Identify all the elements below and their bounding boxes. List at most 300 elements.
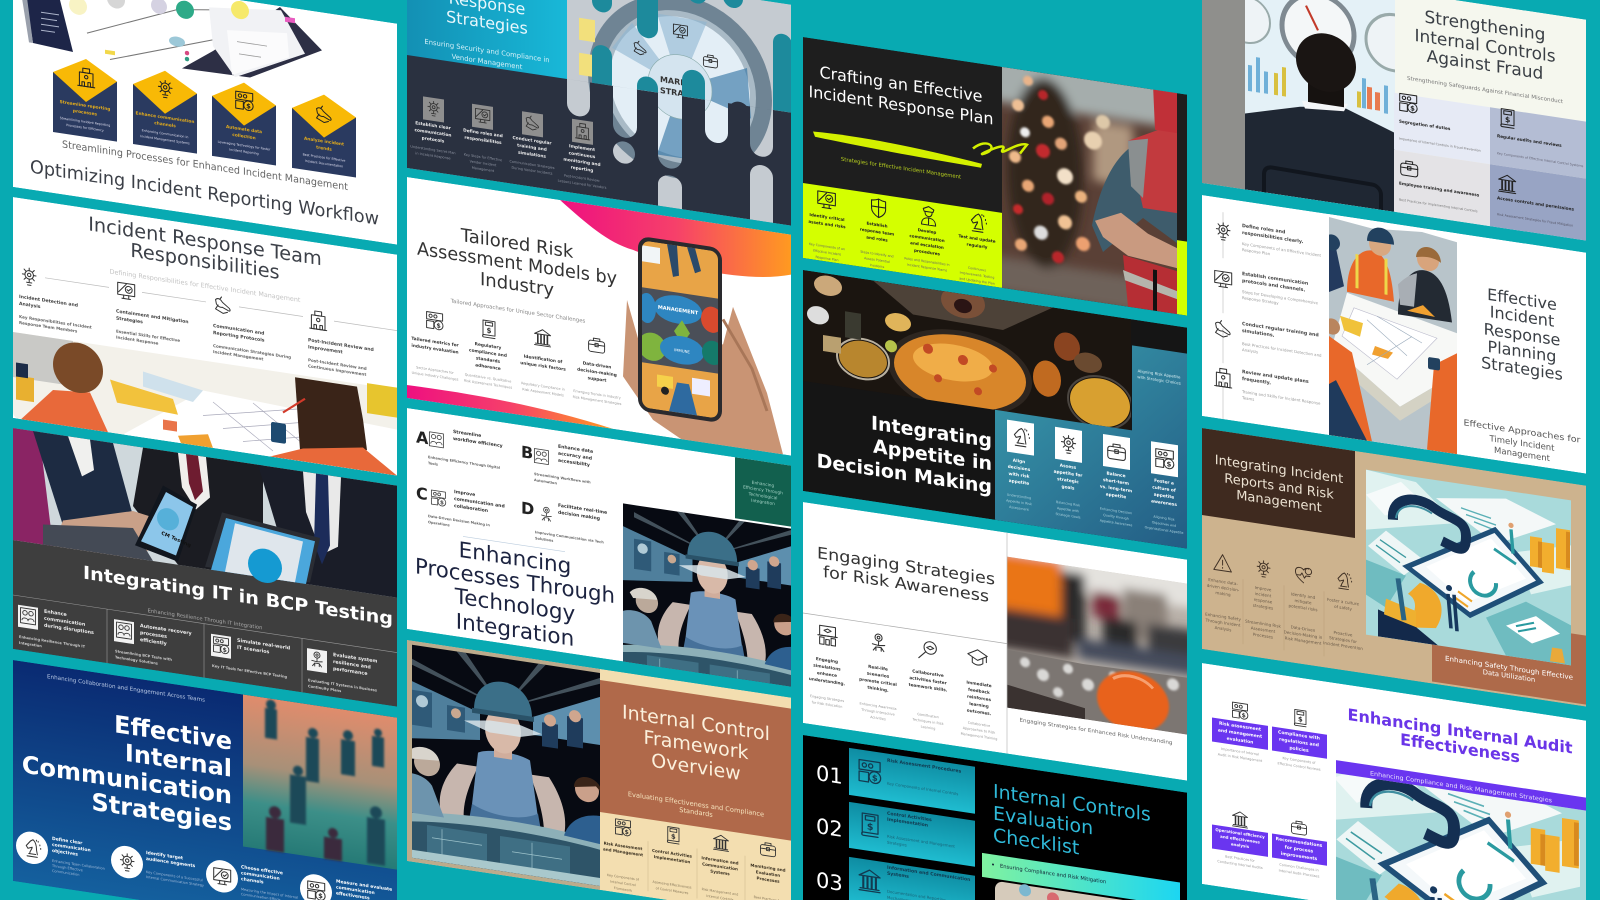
caption: Enhancing Safety Through Effective — [1445, 654, 1573, 682]
item: Collaborative activities: activities foster — [909, 675, 948, 686]
item: Unique risk factors: Regulatory Compliance in — [521, 381, 565, 392]
item: Control Activities Implementation: Implementation — [654, 854, 690, 864]
item: Assess appetite for strategic goals — [1054, 427, 1083, 520]
item: Foster a culture of appetite awareness: Objectives and — [1152, 520, 1176, 528]
item: Incident Detection and Analysis — [19, 267, 109, 338]
title: Tailored Risk — [460, 225, 574, 263]
item: Information and Communication Systems: Risk Management and — [702, 887, 738, 897]
row 02: Control Activities — [887, 811, 932, 823]
title: Evaluation — [993, 802, 1093, 840]
item: Improve incident response strategies: Processes — [1253, 632, 1273, 640]
item: Enhance communication during disruptions: Enhance — [44, 609, 68, 618]
item: Recommendations for process improvements: improvements — [1281, 851, 1318, 862]
grid cell: Employee training and awareness — [1394, 150, 1490, 226]
subtitle: Management — [1494, 446, 1551, 464]
item: Conduct training: Conduct regular training and — [1242, 321, 1319, 339]
item: Operational efficiency and effectiveness analysis — [1212, 808, 1268, 871]
item: Simulate real-world IT scenarios: Simulate real-world — [237, 638, 291, 652]
item: Assess appetite for strategic goals: Balancing Risk — [1056, 500, 1080, 508]
title: Strategies — [92, 788, 232, 837]
panel: Internal Control Framework Overview — [392, 632, 791, 900]
item: Containment and Mitigation Strategies: Incident Response — [116, 334, 159, 346]
card: Streamline reporting processes: processes — [73, 108, 97, 118]
item A: Tools — [428, 461, 438, 467]
item: Establish communication: protocols and channels. — [1242, 278, 1305, 294]
item: Identify critical assets and risks: Identify critical — [809, 212, 845, 222]
row 01 — [816, 743, 975, 814]
photo: immersive tech table — [392, 632, 632, 900]
item: Align decisions with risk appetite: Understanding — [1007, 493, 1031, 500]
item: Tailored metrics: Unique Industry Challenges — [412, 371, 459, 382]
photo: business team with laptops: CM Testing — [160, 531, 192, 549]
item: Identify and mitigate potential risks: Risk Management — [1285, 635, 1322, 646]
text: side note — [1137, 368, 1181, 386]
card: Enhance communication channels: channels — [154, 120, 176, 129]
title: Internal Controls — [1414, 26, 1556, 67]
item: Define clear communication objectives: Define clear — [52, 836, 83, 847]
item: Implement continuous monitoring and reporting: Implement — [569, 143, 595, 153]
item: Automate recovery processes efficiently: processes — [140, 630, 167, 640]
title: Strategies — [1481, 353, 1563, 384]
title — [622, 700, 770, 789]
item: Improve incident response strategies: Assessment — [1251, 625, 1276, 634]
card: Analyze incident trends: Analyze incident — [304, 136, 344, 148]
item: Establish communication: Response Strategy — [1242, 295, 1279, 306]
item: Engaging simulations — [809, 624, 846, 709]
item C: Operations — [428, 520, 450, 527]
item: Operational efficiency and effectiveness analysis: Conducting Internal Audits — [1217, 859, 1263, 870]
item C: C — [416, 483, 428, 504]
panel: Crafting an Effective Incident Response Plan — [803, 27, 1187, 320]
block: title area — [600, 680, 791, 841]
callout: green side box — [735, 457, 791, 527]
item: Identify and mitigate potential risks: mitigate — [1294, 598, 1312, 605]
item: Immediate feedback: outcomes. — [967, 708, 992, 716]
subtitle: Evaluating Effectiveness and Compliance — [628, 790, 764, 819]
item: Information and Communication Systems: Communication — [702, 861, 738, 872]
panel: Integrating Appetite in Decision Making — [803, 262, 1187, 549]
item: Collaborative activities: teamwork skills. — [909, 682, 948, 693]
item: Containment and Mitigation Strategies: Containment and Mitigation — [116, 308, 189, 325]
subtitle: Enhancing Resilience Through IT Integration — [148, 608, 262, 631]
item: Tailored metrics: industry evaluation — [411, 343, 459, 356]
block: caption box — [1432, 612, 1586, 705]
title — [817, 403, 992, 498]
item: Establish clear communication protocols: Understanding Secret Plan — [410, 145, 456, 155]
grid cell: Access controls and permissions — [1490, 164, 1586, 241]
item: Assess appetite for strategic goals: appetite for — [1054, 469, 1083, 479]
title: Integrating Incident — [1215, 453, 1343, 487]
item: Establish clear communication protocols: communication — [415, 127, 451, 139]
item: Regulatory compliance: compliance and — [469, 347, 507, 359]
panel: Enhancing Processes Through Technology Integration — [407, 408, 823, 743]
title: Enhancing Internal Audit — [1348, 705, 1573, 758]
item: Establish clear communication protocols: Establish clear — [415, 120, 452, 132]
item: Balance short-term vs long-term appetite: Balance — [1106, 471, 1126, 479]
title: Crafting an Effective — [819, 63, 983, 106]
item: Enhance communication during disruptions: Integration — [19, 641, 42, 648]
item: Risk assessment and management evaluation: Importance of Internal — [1221, 747, 1259, 757]
item: Enhance data-driven decision-making: Enhance data- — [1208, 577, 1238, 586]
title: Technology — [454, 584, 575, 627]
item: Conduct regular training and simulations: Conduct regular — [513, 135, 552, 147]
row 02: Risk Assessment and Management — [887, 834, 955, 849]
item: Data-driven decision making — [573, 335, 622, 406]
item: Identify and mitigate potential risks — [1284, 565, 1323, 646]
title: Optimizing Incident Reporting Workflow — [30, 157, 379, 230]
item: Recommendations for process improvements: Internal Audit Processes — [1279, 869, 1320, 879]
item: Data-driven decision making: Data-driven — [583, 360, 611, 371]
item: Define roles: Key Components of an Effective Incident — [1242, 241, 1321, 258]
title: Integrating IT in BCP Testing — [83, 563, 393, 630]
item: Identify target audience segments: Identify target — [146, 850, 184, 862]
grid cell: Access controls and permissions: Access controls and permissions — [1497, 195, 1575, 212]
item: Foster a culture of safety: Strategies for — [1329, 635, 1357, 644]
item: Establish response team and roles: and roles — [866, 235, 888, 243]
item: Risk Assessment and Management: Key Components of — [607, 873, 640, 882]
item: Implement continuous monitoring and reporting: reporting — [571, 165, 593, 174]
item: Identify and mitigate potential risks: Identify and — [1291, 591, 1316, 600]
item: Post-Incident Review and Improvement: Improvement — [308, 344, 343, 356]
item: Control Activities Implementation: Assessing Effectiveness — [652, 880, 692, 890]
title: Incident Response Plan — [808, 82, 993, 129]
title: Responsibilities — [130, 239, 280, 284]
column 3 of slides — [803, 27, 1197, 900]
panel: Vendor Incident Response Strategies — [407, 0, 792, 226]
item: Risk Assessment and Management — [603, 817, 643, 894]
item: Develop communication and escalation procedures: communication — [909, 233, 945, 243]
subtitle: Ensuring Security and Compliance in — [424, 38, 550, 64]
item B: accuracy and — [558, 451, 592, 462]
item: Communication and Reporting Protocols: Communication and — [213, 323, 264, 337]
item: Post-Incident Review and Improvement: Post-Incident Review and — [308, 337, 374, 353]
item: Test and update regularly — [958, 211, 996, 286]
item: Enhance data-driven decision-making: driven decision- — [1207, 583, 1240, 593]
block: lime feature band — [803, 183, 1002, 288]
item: Conduct training: Analysis — [1242, 347, 1258, 354]
item: Develop communication and escalation procedures: Incident Response Teams — [907, 263, 947, 273]
photo: worker and Christmas tree bokeh — [993, 56, 1183, 319]
item B: B — [521, 442, 533, 463]
item: Develop communication and escalation procedures: and escalation — [910, 240, 944, 250]
item: Operational efficiency and effectiveness analysis: Best Practices for — [1225, 854, 1255, 863]
item: Balance short-term vs long-term appetite: appetite — [1106, 491, 1126, 500]
illustration: marketing strategy wheel: MARKE — [660, 75, 692, 89]
item: Foster a culture of safety: of safety — [1334, 604, 1352, 612]
item: Define clear communication objectives: Communication — [52, 869, 79, 877]
item: Define roles: Define roles and — [1242, 223, 1285, 235]
title: Enhancing — [459, 538, 571, 580]
item: Develop communication and escalation procedures: Develop — [918, 227, 936, 235]
item: Regulatory compliance: Quantitative vs. Qualitative — [465, 373, 511, 384]
item: Compliance with regulations and policies — [1272, 706, 1327, 773]
item: Control Activities Implementation: of Control Measures — [656, 886, 689, 895]
item: Improve incident response strategies: strategies — [1253, 603, 1273, 611]
item: Unique risk factors — [520, 326, 566, 398]
grid cell: Segregation of duties — [1394, 92, 1490, 164]
subtitle: Timely Incident — [1488, 434, 1555, 454]
item: Identify critical assets and risks: Response Plan — [815, 255, 839, 262]
card: Streamline reporting processes: Streamlining Incident Reporting — [60, 116, 110, 128]
item: Define clear communication objectives: objectives — [52, 848, 78, 858]
item: Establish clear communication protocols — [410, 95, 456, 161]
grid cell: Regular audits and reviews: Key Components of Effective Internal Control Systems — [1497, 151, 1584, 168]
item: Align decisions with risk appetite — [1006, 419, 1034, 513]
item: Operational efficiency and effectiveness analysis: and effectiveness — [1220, 834, 1260, 845]
title: Incident Response Team — [88, 212, 322, 270]
item: Foster a culture of appetite awareness: Aligning Risk — [1153, 515, 1175, 522]
band: subtitle: Enhancing Compliance and Risk Management Strategies — [1370, 770, 1552, 804]
item C — [416, 483, 505, 536]
item: Define roles and responsibilities: Define roles and — [463, 127, 503, 139]
item: Immediate feedback: Approaches to Risk — [963, 726, 995, 735]
subtitle: Strengthening Safeguards Against Financial Misconduct — [1407, 76, 1563, 105]
item: Immediate feedback: Management Training — [961, 732, 997, 741]
item: Identify target audience segments: audience segments — [146, 856, 195, 869]
item: Choose effective communication channels: Measuring the Impact of Internal — [241, 887, 298, 900]
item: Real-life scenarios: Activities — [870, 715, 886, 721]
item: Post-Incident Review and Improvement: Continuous Improvement — [308, 363, 366, 377]
item: Immediate feedback — [961, 647, 997, 741]
photo: man watching clocks and charts — [1224, 0, 1422, 216]
panel: Effective Incident Response Planning Strategies — [1202, 195, 1586, 474]
item: Test and update regularly: regularly — [967, 242, 988, 250]
grid cell: Regular audits and reviews — [1490, 107, 1586, 179]
item: Implement continuous monitoring and reporting: continuous — [569, 150, 596, 160]
item: Automate recovery processes efficiently — [114, 619, 192, 665]
item: Data-driven decision making: support — [588, 375, 606, 384]
item: Engaging simulations: for Risk Education — [812, 700, 842, 709]
item: Foster a culture of appetite awareness: culture of — [1152, 484, 1176, 494]
panel: Optimizing Incident Reporting Workflow — [13, 0, 397, 245]
title: Communication — [22, 750, 232, 810]
item: Develop communication and escalation procedures — [904, 203, 950, 273]
accent: lime side strip — [1177, 240, 1187, 316]
item: Establish response team and roles: Incidents — [870, 263, 885, 269]
item: Foster a culture of appetite awareness: awareness — [1151, 498, 1177, 508]
card: Analyze incident trends: Incident Documentation — [305, 159, 343, 169]
illustration: workers around plan table — [1324, 213, 1457, 454]
title — [415, 531, 615, 658]
item: Foster a culture of appetite awareness: Organizational Appetite — [1145, 525, 1183, 535]
item: Foster a culture of safety: Proactive — [1334, 630, 1353, 638]
photo: checklist detail — [995, 880, 1180, 900]
title: Reports and Risk — [1224, 471, 1334, 503]
dark footer with rounded windows — [407, 55, 791, 226]
item: Choose effective communication channels: communication — [241, 870, 280, 882]
item: Conduct training: simulations. — [1242, 328, 1275, 339]
title: Framework — [643, 726, 749, 764]
item: Foster a culture of safety: Incident Prevention — [1323, 640, 1363, 651]
item: Improve incident response strategies: Improve — [1255, 585, 1272, 592]
item: Define roles and responsibilities: Key Steps for Effective — [464, 153, 502, 162]
item: Foster a culture of appetite awareness — [1145, 440, 1183, 535]
card: Analyze incident trends: Best Practices for Effective — [303, 152, 345, 163]
item D: D — [521, 498, 534, 519]
title: for Risk Awareness — [823, 562, 989, 606]
illustration: hand holding phone: MANAGEMENT — [658, 305, 699, 317]
item: Data-driven decision making: decision-making — [577, 367, 617, 378]
item: Monitoring and Evaluation Processes: Processes — [756, 875, 780, 884]
item: Review plans: Training and Skills for Incident Response — [1241, 389, 1321, 406]
item D: Solutions — [535, 536, 553, 543]
title: Assessment Models by — [417, 239, 617, 290]
item: Collaborative activities: Techniques in Risk — [911, 717, 944, 726]
card: Streamline reporting processes: Streamline reporting — [60, 99, 110, 113]
item: Collaborative activities: Learning — [921, 725, 935, 731]
card: Enhance communication channels: Incident Management Systems — [140, 134, 190, 146]
item: Align decisions with risk appetite: appetite — [1009, 478, 1029, 487]
item: Identify target audience segments: Key Components of a Successful — [146, 870, 203, 882]
title: Engaging Strategies — [817, 543, 995, 589]
title: Effective — [114, 710, 232, 756]
item: Enhance communication during disruptions — [18, 604, 94, 648]
item: Establish clear communication protocols: in Incident Response — [415, 151, 451, 161]
item: Improve incident response strategies: Streamlining Risk — [1245, 618, 1281, 629]
item: Define clear communication objectives — [16, 832, 105, 876]
item: Balance short-term vs long-term appetite: short-term — [1103, 477, 1130, 487]
item: Identify target audience segments: Internal Communication Strategy — [146, 875, 204, 888]
shape: bottom gradient swoosh — [407, 385, 613, 429]
column 4 of slides — [1202, 0, 1586, 900]
item: Align decisions with risk appetite: Appetite in Risk — [1006, 498, 1032, 506]
item C: communication and — [454, 496, 505, 510]
subtitle — [1464, 418, 1581, 469]
subtitle: Defining Responsibilities for Effective Incident Management — [110, 268, 301, 304]
item: Align decisions with risk appetite: Align — [1013, 457, 1025, 465]
item: Immediate feedback: feedback — [968, 687, 990, 695]
item: Communication and Reporting Protocols: Incident Management — [213, 349, 263, 362]
panel: Engaging Strategies for Risk Awareness — [803, 502, 1197, 782]
item: Collaborative activities: Gamification — [917, 712, 939, 719]
item: Establish response team and roles: response team — [860, 227, 894, 237]
item: Define clear communication objectives: Through Effective — [51, 864, 83, 872]
item: Implement continuous monitoring and reporting: Lessons Learned for Vendors — [558, 179, 607, 190]
accent: lime brush stroke with arrow — [813, 112, 1027, 175]
card: Enhance communication channels — [133, 66, 197, 154]
panel: Incident Response Team Responsibilities — [13, 197, 397, 476]
title — [417, 219, 617, 311]
header block — [407, 0, 567, 81]
item: Real-life scenarios: Enhancing Awareness — [859, 701, 897, 711]
column 2 of slides — [407, 0, 791, 900]
item: Containment and Mitigation Strategies: Strategies — [116, 315, 143, 326]
item: Choose effective communication channels: Choose effective — [241, 864, 283, 876]
item: Implement continuous monitoring and reporting: Post-Incident Review: — [564, 174, 600, 183]
item: Review plans — [1215, 365, 1321, 412]
item: Measure and evaluate communication effectiveness: Measure and evaluate — [336, 878, 392, 893]
item: Foster a culture of safety: Foster a culture — [1327, 597, 1359, 607]
item: Unique risk factors: Identification of — [524, 354, 562, 365]
item: Establish communication: Establish communication — [1242, 271, 1308, 287]
grid cell: Access controls and permissions: Risk Assessment Strategies for Fraud Mitigation — [1497, 212, 1573, 228]
item: Identify critical assets and risks: assets and risks — [808, 219, 846, 229]
item: Identify critical assets and risks: Key Components of an — [809, 242, 845, 251]
item: Data-driven decision making: Emerging Trends in Industry — [573, 389, 621, 400]
bullet bar — [982, 853, 1180, 900]
item: Enhance data-driven decision-making: Through Incident — [1205, 617, 1241, 628]
item: Risk Assessment and Management: and Management — [603, 846, 643, 857]
item: Assess appetite for strategic goals: Appetite with — [1057, 506, 1079, 513]
item: Collaborative activities: Collaborative — [912, 668, 944, 678]
subtitle: Vendor Management — [452, 53, 523, 71]
title: Effective — [1487, 285, 1557, 314]
title: Incident — [1490, 302, 1554, 331]
item: Post-Incident Review and Improvement: Post-Incident Review and — [308, 357, 367, 371]
item: Review plans: Review and update plans — [1242, 369, 1309, 385]
title: Overview — [651, 749, 741, 785]
item: Risk assessment and management evaluation: Audit in Risk Management — [1218, 752, 1263, 763]
item: Immediate feedback: Collaborative — [968, 721, 990, 728]
photo: food spread — [803, 262, 1132, 440]
grid cell: Segregation of duties: Segregation of duties — [1399, 119, 1451, 131]
item: Establish response team and roles — [860, 196, 894, 271]
callout: green side box: Technological — [748, 491, 777, 502]
item: Post-Incident Review and Improvement — [308, 310, 397, 382]
item: Engaging simulations: Engaging — [816, 656, 838, 664]
item D: Facilitate real-time — [558, 503, 607, 516]
item: Automate recovery processes efficiently: efficiently — [140, 637, 168, 647]
title: Against Fraud — [1427, 47, 1543, 84]
item: Measure and evaluate communication effectiveness — [300, 872, 392, 900]
card: Streamline reporting processes: Processes for Efficiency — [66, 123, 104, 133]
item: Operational efficiency and effectiveness analysis: Operational efficiency — [1215, 827, 1265, 839]
row 03: Systems — [887, 871, 909, 880]
title: Planning — [1488, 337, 1556, 366]
title: Response — [1484, 319, 1560, 350]
item: Identify target audience segments — [111, 844, 204, 890]
item: Monitoring and Evaluation Processes: Evaluation — [756, 869, 780, 878]
row 03: Information and Communication — [887, 865, 970, 883]
item: Enhance data-driven decision-making: Analysis — [1215, 625, 1231, 632]
item: Define clear communication objectives: communication — [52, 842, 91, 854]
item: Conduct regular training and simulations: training and — [517, 143, 547, 153]
block: brown title box — [1202, 428, 1355, 538]
callout: green side box: Efficiency Through — [743, 484, 783, 496]
item: Engaging simulations: simulations — [813, 663, 841, 672]
item: Review plans: Teams — [1241, 395, 1254, 402]
title — [1215, 453, 1343, 519]
item: Test and update regularly: Continuous — [968, 266, 986, 272]
item D: Improving Communication via Tech — [535, 530, 604, 545]
item: Test and update regularly: Test and update — [958, 233, 996, 244]
item: Engaging simulations: understanding. — [809, 676, 846, 686]
item: Automate recovery processes efficiently: Automate recovery — [140, 623, 193, 637]
item: Implement continuous monitoring and reporting — [558, 117, 607, 190]
item: Enhance data-driven decision-making — [1205, 552, 1241, 634]
item: Establish communication — [1215, 267, 1318, 311]
item: Establish response team and roles: Assess Potential — [864, 256, 890, 264]
item: Choose effective communication channels — [206, 858, 298, 900]
item: Containment and Mitigation Strategies: Essential Skills for Effective — [116, 328, 180, 343]
item: Simulate real-world IT scenarios: Key IT Tools for Effective BCP Testing — [212, 664, 288, 679]
item: Balance short-term vs long-term appetite: vs. long-term — [1100, 484, 1133, 494]
card: Automate data collection: collection — [232, 132, 256, 141]
photo: training session with orange bag — [997, 545, 1197, 741]
item: Evaluate system resilience and performance: Continuity Plans — [308, 684, 341, 693]
item: Conduct regular training and simulations: During Vendor Incidents — [512, 166, 553, 176]
card: Analyze incident trends — [292, 90, 356, 177]
item: Evaluate system resilience and performance: performance — [333, 666, 368, 677]
panel: Tailored Risk Assessment Models by Industry — [407, 177, 791, 457]
item: Define roles: Response Plan — [1242, 247, 1271, 256]
item: Real-life scenarios: Real-life — [868, 664, 888, 672]
item: Align decisions with risk appetite: decisions — [1008, 464, 1031, 473]
item C: Improve — [454, 489, 475, 498]
title — [1481, 284, 1563, 384]
caption: Engaging Strategies for Enhanced Risk Understanding — [1020, 717, 1173, 746]
item: Define roles and responsibilities: responsibilities — [464, 135, 502, 146]
